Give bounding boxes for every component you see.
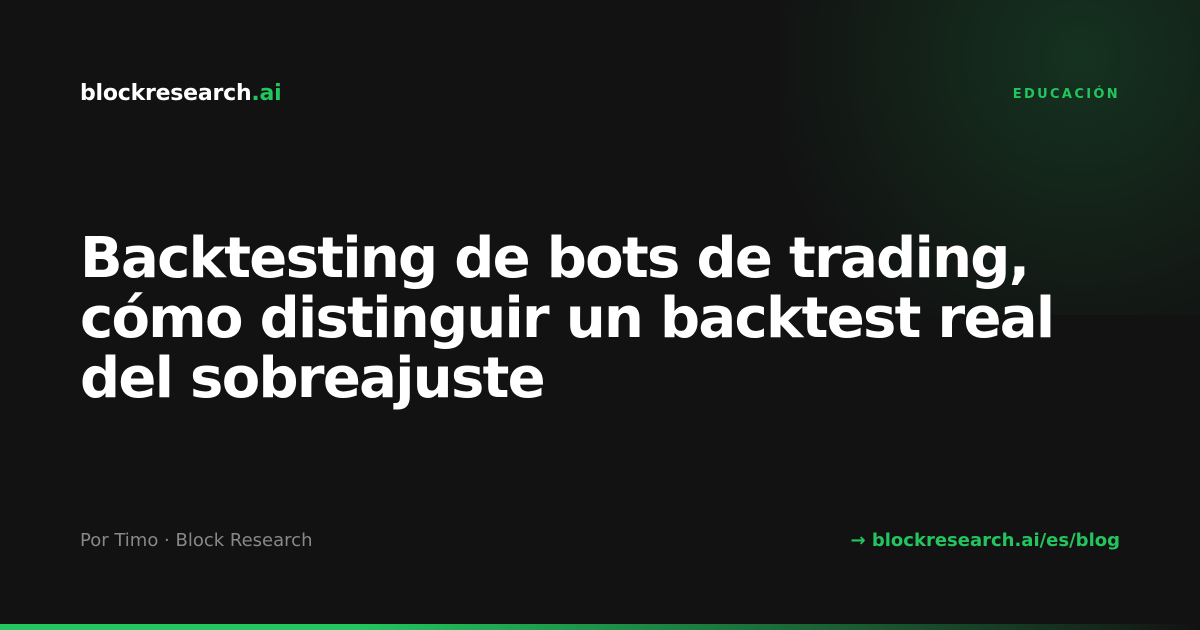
- title: Backtesting de bots de trading,: [80, 226, 1028, 291]
- blog link: → blockresearch.ai/es/blog: [851, 530, 1120, 551]
- background glow: [780, 0, 1200, 315]
- title: [80, 226, 1053, 411]
- title: cómo distinguir un backtest real: [80, 286, 1053, 351]
- bottom accent bar: [0, 624, 1200, 630]
- title: del sobreajuste: [80, 346, 544, 411]
- brand logo: blockresearch.ai: [80, 81, 282, 106]
- author: Por Timo · Block Research: [80, 530, 312, 551]
- category label: EDUCACIÓN: [1013, 87, 1120, 102]
